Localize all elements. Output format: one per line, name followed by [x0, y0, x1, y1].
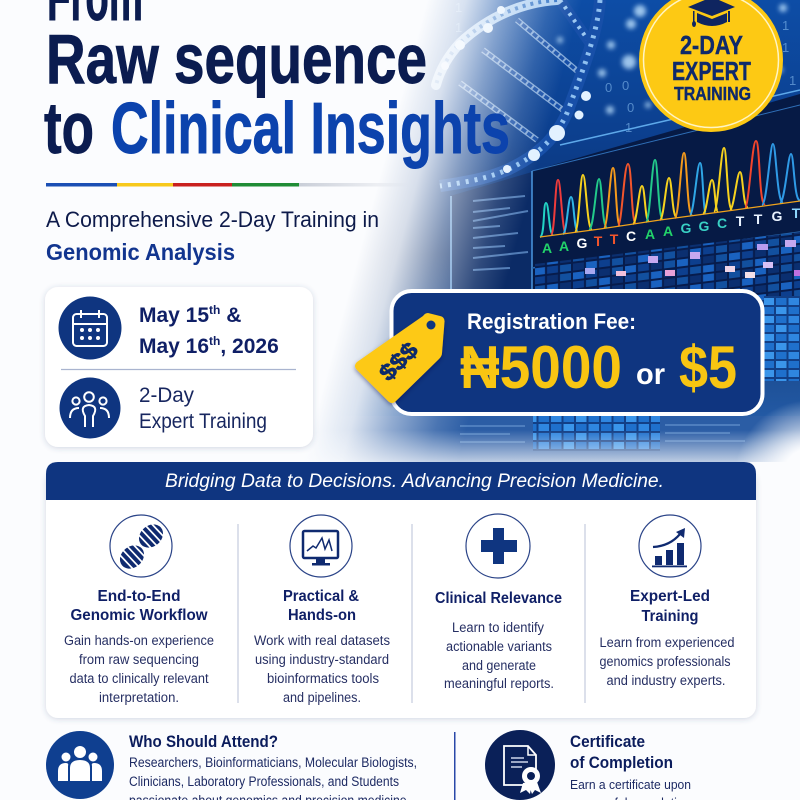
column: practical and hands-on: Hands-on: [288, 607, 356, 624]
section: certificate of completion: of Completion: [570, 753, 673, 772]
icon: people group: [60, 378, 120, 438]
panel: key benefits: [46, 462, 756, 718]
section: who should attend: Researchers, Bioinformaticians, Molecular Biologists,: [129, 755, 417, 770]
column: expert-led training: Expert-Led: [630, 588, 710, 605]
dates: th: [209, 303, 220, 317]
registration fee box: ₦5000: [460, 334, 622, 401]
title: Raw sequence: [46, 20, 427, 98]
column: practical and hands-on: bioinformatics tools: [267, 671, 379, 686]
bokeh lights and binary digits: 0: [605, 80, 612, 95]
icon: graduation cap: [688, 0, 735, 27]
panel: date and format: [45, 287, 313, 447]
registration fee box: $5: [679, 334, 737, 401]
bokeh lights and binary digits: 1: [455, 20, 462, 35]
title: [44, 0, 510, 169]
column: clinical relevance: [435, 514, 562, 691]
column: expert-led training: Training: [642, 608, 698, 625]
column: end-to-end workflow: interpretation.: [99, 690, 179, 705]
column: end-to-end workflow: from raw sequencing: [79, 652, 199, 667]
column: end-to-end workflow: End-to-End: [98, 588, 180, 605]
bokeh lights and binary digits: 1: [782, 40, 789, 55]
column: clinical relevance: and generate: [462, 658, 536, 673]
base calls: G: [577, 235, 588, 251]
icon: audience: [46, 731, 114, 799]
bokeh lights and binary digits: [455, 0, 796, 135]
dates: May 15: [139, 304, 209, 327]
bokeh lights and binary digits: 1: [770, 70, 777, 85]
base calls: G: [699, 218, 710, 234]
badge: 2-day expert training: 2-DAY: [680, 30, 743, 60]
dates: [139, 303, 279, 358]
title: Clinical Insights: [111, 89, 510, 169]
base calls: A: [645, 226, 655, 242]
badge: 2-day expert training: EXPERT: [672, 56, 751, 86]
training format: [139, 384, 267, 433]
chromatogram screen: [532, 90, 800, 300]
base calls: A: [663, 223, 673, 239]
base calls: C: [717, 215, 727, 231]
section: who should attend: Who Should Attend?: [129, 732, 278, 751]
column: end-to-end workflow: Genomic Workflow: [70, 607, 208, 624]
dates: &: [220, 304, 241, 327]
column: expert-led training: and industry experts.: [606, 673, 726, 688]
bokeh lights and binary digits: 1: [782, 18, 789, 33]
column: end-to-end workflow: [64, 515, 214, 705]
dates: , 2026: [220, 335, 279, 358]
bokeh lights and binary digits: 1: [625, 120, 632, 135]
base calls: T: [736, 213, 745, 229]
multicolour rule: [46, 183, 409, 186]
column: practical and hands-on: [254, 515, 390, 705]
column: practical and hands-on: using industry-standard: [255, 652, 389, 667]
title: to: [44, 89, 94, 169]
left data panel: [450, 172, 532, 292]
column: clinical relevance: actionable variants: [446, 639, 552, 654]
base calls: T: [594, 233, 603, 249]
icon: DNA: [110, 515, 172, 577]
registration fee box: [355, 291, 762, 414]
icon: price tag: [355, 313, 445, 403]
icon: monitor with chart: [290, 515, 352, 577]
column: expert-led training: genomics professionals: [600, 654, 731, 669]
base calls: A: [559, 238, 569, 254]
base calls: T: [754, 211, 763, 227]
section: who should attend: Clinicians, Laboratory Professionals, and Students: [129, 774, 399, 789]
banner tagline: [46, 462, 756, 500]
icon: calendar: [58, 296, 122, 360]
column: practical and hands-on: Work with real datasets: [254, 633, 390, 648]
icon: medical cross: [466, 514, 530, 578]
training format: 2-Day: [139, 384, 194, 407]
sequencing trace peaks: [540, 141, 800, 237]
column: clinical relevance: meaningful reports.: [444, 676, 554, 691]
badge: 2-day expert training: TRAINING: [674, 84, 751, 104]
column: expert-led training: [600, 515, 734, 688]
base calls: [542, 205, 800, 256]
column: end-to-end workflow: data to clinically relevant: [70, 671, 209, 686]
base calls: A: [542, 240, 552, 256]
divider: [454, 732, 456, 800]
column: practical and hands-on: Practical &: [283, 588, 359, 605]
DNA double helix: [436, 0, 600, 186]
column: practical and hands-on: and pipelines.: [283, 690, 361, 705]
subtitle: Genomic Analysis: [46, 239, 235, 265]
base calls: G: [772, 208, 783, 224]
column: end-to-end workflow: Gain hands-on experience: [64, 633, 214, 648]
bokeh lights and binary digits: 0: [627, 100, 634, 115]
registration fee box: Registration Fee:: [467, 309, 636, 334]
icon: price tag: $$$: [374, 336, 423, 386]
bokeh lights and binary digits: 0: [622, 78, 629, 93]
hero image: genomic data screens and DNA: [300, 0, 800, 465]
column: clinical relevance: Clinical Relevance: [435, 590, 562, 607]
banner tagline: Bridging Data to Decisions. Advancing Precision Medicine.: [165, 471, 664, 492]
section: who should attend: [46, 731, 417, 800]
column: clinical relevance: Learn to identify: [452, 620, 544, 635]
column: expert-led training: Learn from experienced: [600, 635, 734, 650]
dates: th: [209, 334, 220, 348]
bokeh lights and binary digits: 1: [455, 0, 462, 15]
icon: growth chart: [639, 515, 701, 577]
registration fee box: or: [636, 358, 665, 391]
subtitle: A Comprehensive 2-Day Training in: [46, 207, 379, 232]
heatmap blocks: [340, 232, 800, 462]
base calls: T: [610, 231, 619, 247]
base calls: C: [626, 228, 636, 244]
base calls: G: [681, 220, 692, 236]
section: certificate of completion: Earn a certificate upon: [570, 777, 691, 792]
section: certificate of completion: [485, 730, 694, 800]
section: certificate of completion: Certificate: [570, 732, 645, 751]
subtitle: [46, 207, 379, 265]
badge: 2-day expert training: [639, 0, 783, 132]
bokeh lights and binary digits: 1: [789, 73, 796, 88]
dates: May 16: [139, 335, 209, 358]
training format: Expert Training: [139, 410, 267, 433]
icon: certificate: [485, 730, 555, 800]
